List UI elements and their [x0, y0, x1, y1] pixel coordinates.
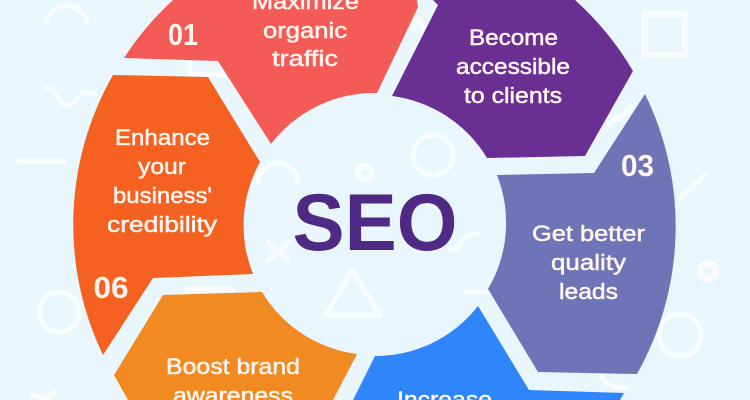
panel: increase [353, 306, 624, 400]
label: boost brand awareness: Boost brand [166, 354, 300, 379]
panel: boost brand awareness [114, 292, 357, 400]
label: enhance your business' credibility: credibility [107, 212, 217, 237]
panel: 06 enhance your business' credibility [73, 75, 260, 355]
title: SEO: SEO [292, 178, 458, 268]
label: become accessible to clients: Become [469, 25, 558, 50]
segment: purple [392, 0, 633, 158]
label: get better quality leads: quality [551, 250, 626, 275]
label: become accessible to clients: to clients [464, 83, 562, 108]
panel: become accessible to clients [392, 0, 633, 158]
panel: 01 maximize organic traffic [124, 0, 418, 144]
label: get better quality leads: Get better [532, 221, 645, 246]
label: enhance your business' credibility: Enhance [115, 125, 210, 150]
segment: periwinkle [488, 94, 676, 374]
label: enhance your business' credibility: your [138, 154, 186, 179]
label: maximize organic traffic: traffic [272, 46, 338, 71]
label: become accessible to clients: accessible [456, 54, 570, 79]
number 06: 06 [94, 270, 128, 305]
label: maximize organic traffic [252, 0, 359, 71]
label: maximize organic traffic: organic [263, 18, 347, 43]
number 01: 01 [168, 17, 198, 52]
segment: deep orange [73, 75, 260, 355]
segment: red [124, 0, 418, 144]
panel: 03 get better quality leads [488, 94, 676, 374]
number 03: 03 [621, 148, 654, 183]
label: get better quality leads: leads [559, 279, 618, 304]
label: become accessible to clients [456, 25, 570, 108]
label: get better quality leads [532, 221, 645, 304]
label: enhance your business' credibility: business' [113, 183, 212, 208]
label: enhance your business' credibility [107, 125, 217, 237]
segment: orange [114, 292, 357, 400]
label: boost brand awareness [166, 354, 300, 400]
segment: blue [353, 306, 624, 400]
